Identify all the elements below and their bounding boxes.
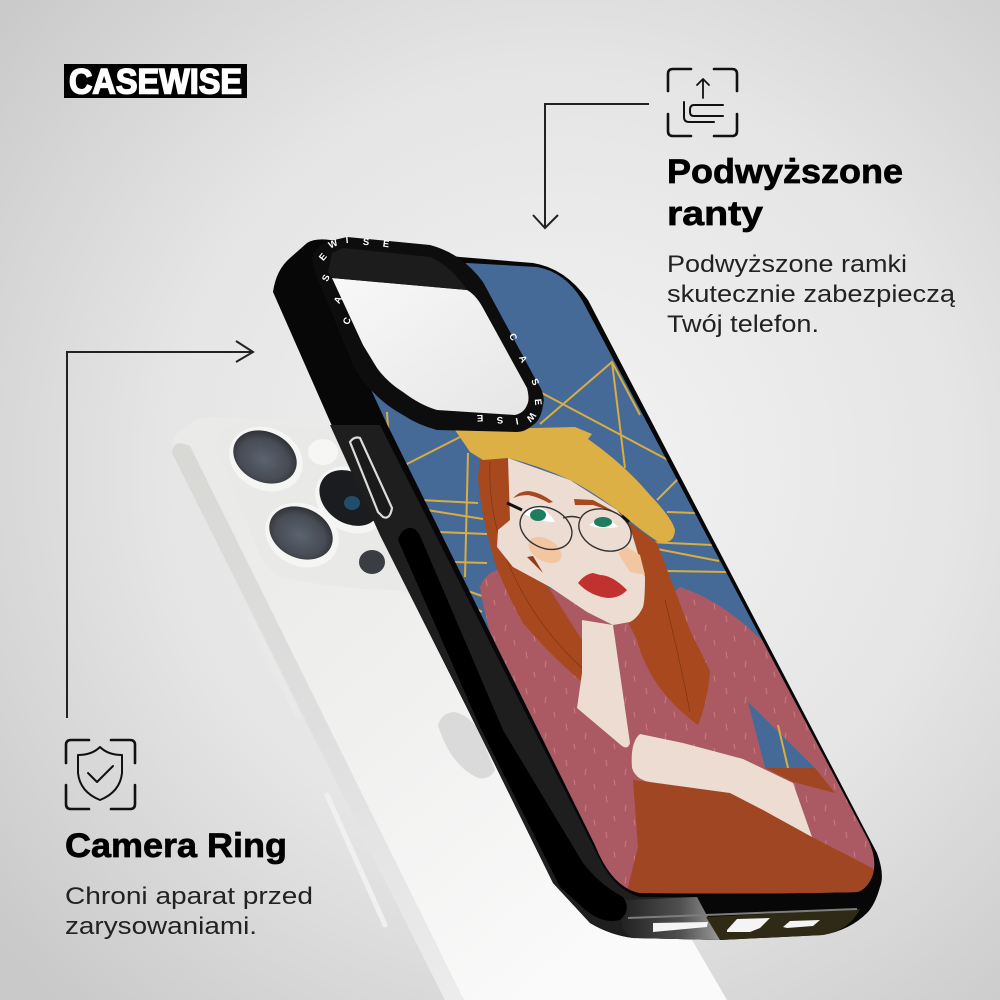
side buttons — [250, 618, 298, 716]
ring lettering: E — [382, 239, 390, 250]
text: raised edges description: Podwyższone ramki — [667, 251, 907, 278]
ring lettering: I — [515, 415, 519, 426]
hair strands — [490, 462, 690, 712]
ring lettering: E — [477, 412, 483, 423]
heading: Podwyższone ranty — [667, 153, 903, 233]
ring lettering: S — [528, 377, 541, 387]
ring lettering — [317, 235, 543, 426]
arrow: camera ring pointer — [67, 341, 253, 718]
lens: top — [218, 415, 314, 503]
lens: bottom — [254, 491, 350, 579]
lips — [578, 573, 627, 598]
white phone — [172, 415, 727, 1000]
ring lettering: E — [317, 251, 330, 263]
glasses — [506, 502, 632, 552]
translucent lower side — [330, 425, 720, 940]
ring lettering: C — [341, 316, 354, 327]
text: camera ring description: Chroni aparat przed — [65, 883, 313, 910]
icon: raised edges — [668, 69, 737, 136]
heading: Podwyższone ranty: Podwyższone — [667, 153, 903, 191]
phone logo — [438, 712, 495, 778]
eyes — [523, 507, 618, 528]
side channel — [398, 528, 627, 921]
phone side bevel — [172, 443, 464, 1000]
sweater window and stripe — [748, 702, 835, 793]
ring lettering: E — [532, 398, 543, 406]
hair — [478, 458, 710, 725]
ring lettering: I — [345, 235, 349, 246]
text: camera ring description: zarysowaniami. — [65, 913, 257, 940]
beret — [455, 427, 675, 542]
ring lettering: A — [332, 295, 345, 306]
heading: Podwyższone ranty: ranty — [667, 195, 763, 233]
ring lettering: W — [524, 410, 538, 424]
ring lettering: W — [327, 238, 340, 251]
sweater knit texture — [480, 570, 890, 900]
ring lettering: S — [362, 237, 370, 248]
olive bottom edge — [706, 909, 860, 940]
finger mark — [527, 556, 543, 573]
camera plateau — [215, 424, 430, 594]
eyebrows — [513, 491, 617, 513]
translucent bottom corner — [621, 897, 720, 940]
lidar sensor — [359, 550, 385, 574]
bottom highlight — [628, 909, 857, 918]
heading: Camera Ring: Camera Ring — [65, 827, 287, 865]
gold geometric lines — [387, 362, 727, 612]
lens: right — [302, 453, 400, 547]
camera ring — [312, 235, 544, 432]
icon: shield — [66, 740, 135, 809]
case artwork — [371, 263, 874, 894]
flash — [308, 439, 338, 465]
sweater — [480, 570, 890, 900]
ring lettering: S — [320, 273, 333, 283]
text: raised edges description: Twój telefon. — [667, 311, 819, 338]
arrow: raised edges pointer — [533, 104, 649, 228]
face — [497, 458, 645, 625]
logo: CASEWISE: CASEWISE — [69, 62, 242, 102]
camera hole — [332, 278, 528, 415]
bottom ports — [653, 918, 820, 932]
ring inner bevel — [328, 248, 467, 290]
side button cutout — [350, 438, 392, 518]
arm and hand — [577, 620, 630, 747]
cheeks — [528, 536, 645, 575]
text: raised edges description: skutecznie zabezpieczą — [667, 281, 956, 308]
text: raised edges description — [667, 251, 956, 338]
dress — [628, 780, 874, 894]
forearm — [632, 734, 812, 837]
ring lettering: A — [516, 354, 529, 365]
text: camera ring description — [65, 883, 313, 940]
protective case — [273, 239, 882, 940]
ring lettering: S — [496, 414, 504, 425]
ring lettering: C — [506, 332, 519, 343]
